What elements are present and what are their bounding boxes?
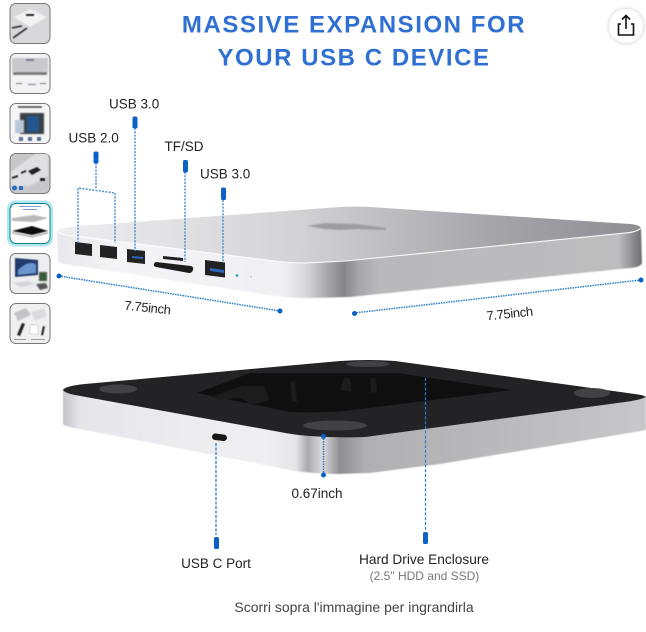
top device: silver hub with ports xyxy=(57,207,642,298)
port labels: USB 3.0 xyxy=(200,166,250,182)
pill marker: USB 2.0 xyxy=(94,152,98,164)
callout: Hard Drive Enclosure xyxy=(359,378,489,583)
port labels: TF/SD xyxy=(164,139,204,154)
device silver edge xyxy=(63,389,646,474)
thumbnail: drive enclosure xyxy=(10,104,50,144)
thumbnail: package contents xyxy=(10,304,50,344)
USB 2.0 port left xyxy=(75,242,92,256)
thumbnail gallery xyxy=(8,4,52,344)
callout: USB C Port: USB C Port xyxy=(181,556,251,571)
dimension: left width xyxy=(56,274,282,317)
callout: thickness 0.67inch xyxy=(291,434,343,501)
USB 3.0 port right xyxy=(205,260,225,278)
icon: share button xyxy=(609,9,643,43)
bottom device: underside with enclosure xyxy=(63,360,646,474)
pill marker: TF/SD xyxy=(183,160,188,172)
port labels: USB 2.0 xyxy=(68,130,119,146)
enclosure cavity xyxy=(197,373,512,412)
card slots xyxy=(154,256,193,273)
LED indicators xyxy=(236,274,252,278)
device front edge xyxy=(57,228,642,298)
thumbnail: front view diagram xyxy=(10,54,50,94)
dimension: right width xyxy=(352,278,644,323)
pill marker: USB 3.0 right xyxy=(221,188,226,200)
device black base xyxy=(63,360,646,437)
pill marker: USB 3.0 left xyxy=(132,116,138,128)
USB C port xyxy=(212,433,227,441)
USB 2.0 port right xyxy=(100,245,117,259)
title xyxy=(182,12,526,72)
dimension: right width: 7.75inch xyxy=(486,304,533,323)
title: YOUR USB C DEVICE xyxy=(217,44,491,72)
callout: USB C Port xyxy=(181,443,251,571)
callouts: top device ports xyxy=(78,128,223,262)
port labels: USB 3.0 xyxy=(109,96,159,112)
logo on device top xyxy=(307,223,387,230)
callout: Hard Drive Enclosure: Hard Drive Enclosure xyxy=(359,552,489,567)
rubber feet xyxy=(99,361,610,430)
USB 3.0 port xyxy=(127,249,145,264)
callout: thickness 0.67inch: 0.67inch xyxy=(291,486,343,501)
caption: Scorri sopra l'immagine per ingrandirla xyxy=(234,599,474,615)
thumbnail: selected current image xyxy=(8,202,52,245)
callout: Hard Drive Enclosure: (2.5" HDD and SSD) xyxy=(370,569,479,583)
port labels xyxy=(68,96,250,182)
thumbnail: desktop setup xyxy=(10,254,50,294)
dimension: left width: 7.75inch xyxy=(124,298,171,317)
title: MASSIVE EXPANSION FOR xyxy=(182,12,526,38)
thumbnail: mini hub with cables xyxy=(10,4,50,44)
thumbnail: card slots close-up xyxy=(10,154,50,194)
device top surface xyxy=(57,207,641,263)
